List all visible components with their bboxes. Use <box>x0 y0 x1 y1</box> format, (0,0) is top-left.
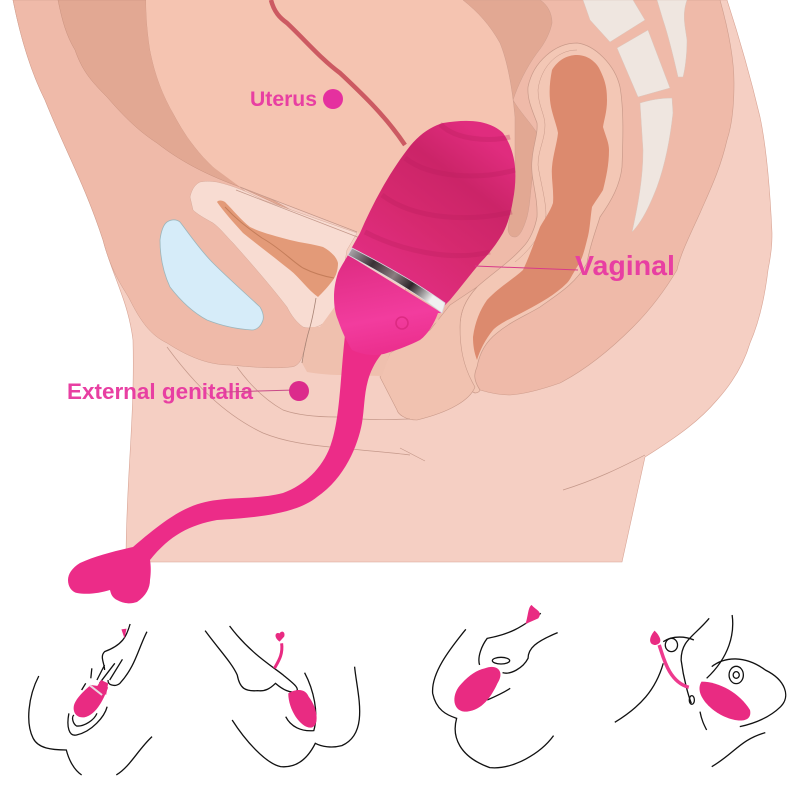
step 2 device <box>274 632 317 728</box>
bowel fold upper right <box>463 0 552 237</box>
label: External genitalia: External genitalia <box>67 379 254 404</box>
label: Uterus: Uterus <box>250 88 317 111</box>
inner wall line <box>515 50 577 262</box>
left pelvic band <box>13 0 330 368</box>
device lower bulb <box>334 255 442 355</box>
bladder pocket <box>190 181 357 328</box>
rectum inner <box>473 55 609 360</box>
sacrum bones <box>583 0 687 232</box>
perineal tissue between device and rectum <box>380 287 477 420</box>
device metal ring <box>348 248 445 313</box>
device: main illustration <box>68 121 515 603</box>
body silhouette <box>13 0 772 562</box>
panel: usage step 1 <box>29 624 152 775</box>
label: Vaginal <box>475 250 675 281</box>
dark peritoneal fold <box>58 0 300 215</box>
bladder: blue <box>160 220 263 330</box>
device tail and heart tip <box>68 335 385 603</box>
fine anatomy lines <box>167 187 645 490</box>
power icon <box>396 317 408 329</box>
rectum outer wall <box>460 43 623 393</box>
device ribbed body <box>348 121 515 307</box>
step 4 device <box>650 631 750 721</box>
device ribs <box>365 124 515 256</box>
posterior band <box>400 0 734 395</box>
vestibule tissue <box>217 200 338 297</box>
label: Vaginal: Vaginal <box>575 250 675 281</box>
lower tissue block <box>302 290 440 376</box>
step 3 device <box>454 605 540 712</box>
panel: anatomical cross-section <box>13 0 772 562</box>
panel: usage step 3 <box>433 605 558 768</box>
uterus and abdominal cavity <box>146 0 515 280</box>
uterine tube <box>271 0 405 145</box>
panel: usage step 4 <box>615 615 786 767</box>
step 1 device <box>74 629 127 717</box>
panel: usage step 2 <box>205 626 360 767</box>
